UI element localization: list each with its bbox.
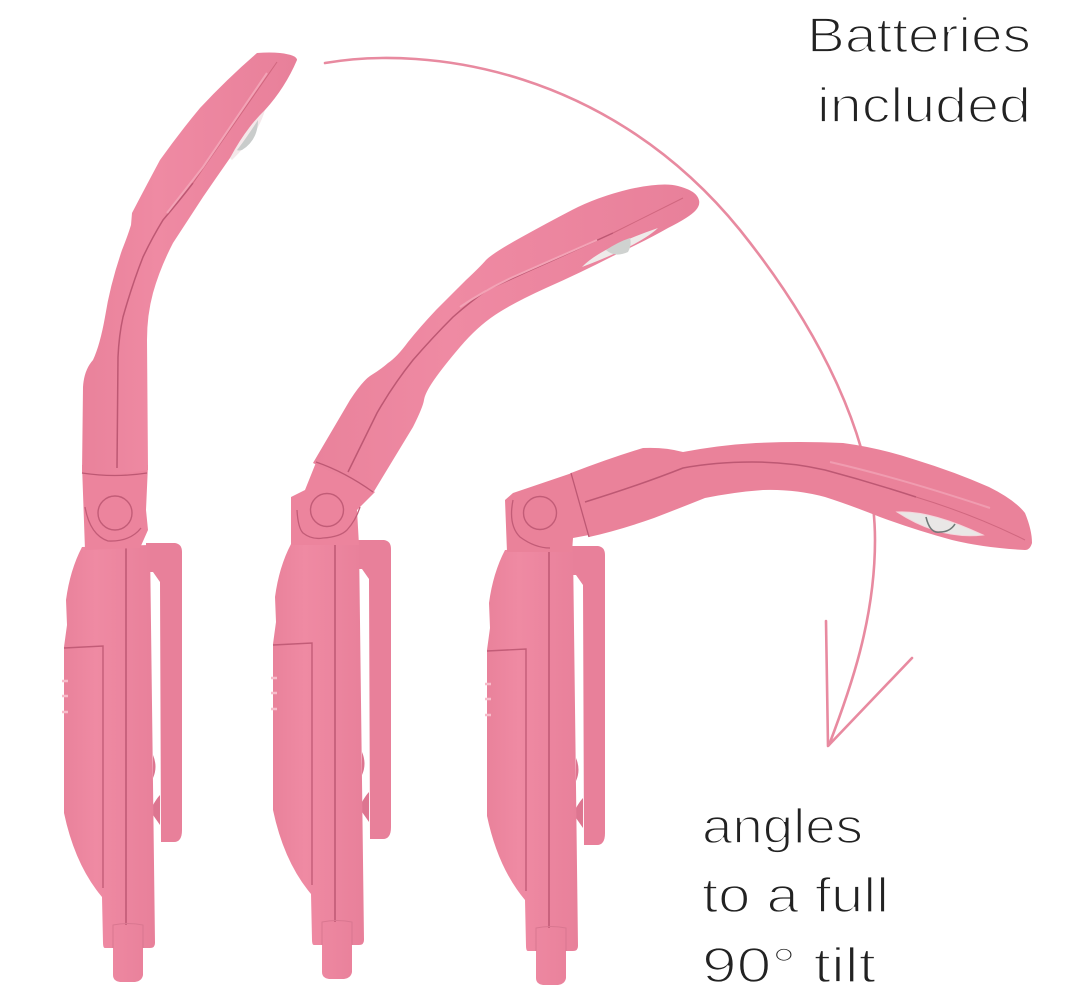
caption: angles to a full 90° tilt: to a full <box>702 869 889 923</box>
caption: angles to a full 90° tilt: 90° tilt <box>702 939 876 993</box>
caption: angles to a full 90° tilt: angles <box>702 800 863 854</box>
caption: angles to a full 90° tilt <box>702 800 889 993</box>
lamp 1: upright <box>62 52 297 982</box>
lamp 3: fully tilted <box>485 442 1032 985</box>
caption: batteries included: included <box>817 79 1031 133</box>
caption: batteries included <box>807 9 1031 133</box>
caption: batteries included: Batteries <box>807 9 1031 63</box>
curved tilt arrow <box>325 58 912 746</box>
lamp 2: half tilted <box>271 185 699 979</box>
